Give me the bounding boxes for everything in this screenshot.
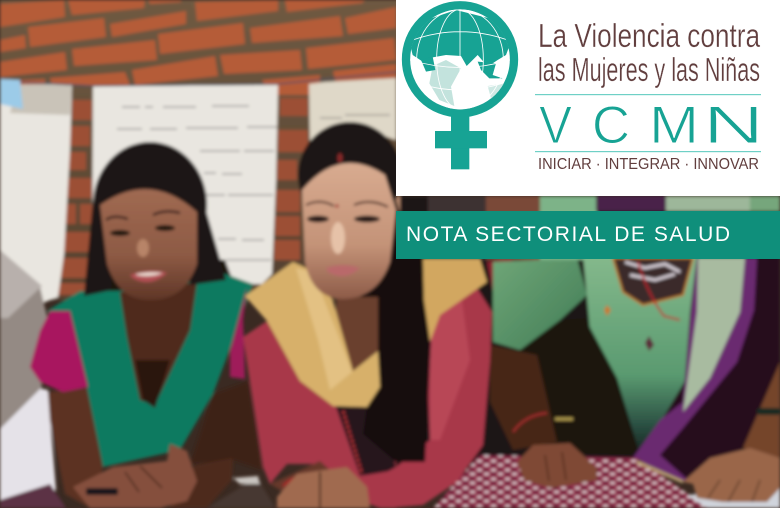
acronym: VCMN: M xyxy=(649,96,699,155)
woman centre: face xyxy=(298,122,402,299)
hand resting on table xyxy=(517,443,780,502)
tagline: INICIAR · INTEGRAR · INNOVAR xyxy=(538,156,759,173)
woman centre: dress, scarf, hair, hands xyxy=(243,200,492,508)
heading: La Violencia contra las Mujeres y las Niñas xyxy=(538,17,761,88)
brick wall xyxy=(0,0,400,300)
posters on the wall xyxy=(0,72,396,320)
girl left: face xyxy=(84,142,226,300)
banner: nota sectorial de salud: NOTA SECTORIAL DE SALUD xyxy=(406,223,730,246)
person at left edge: grey sleeve and white cloth xyxy=(0,250,56,508)
panel: white logo background xyxy=(396,0,780,196)
girl left: hair, arms, scarf, sleeves, hands xyxy=(30,250,262,508)
acronym: VCMN: N xyxy=(703,96,764,155)
icon: female symbol with globe xyxy=(406,5,514,169)
tablecloth and paper xyxy=(0,455,780,508)
banner: nota sectorial de salud xyxy=(396,211,780,259)
logo: VCMN xyxy=(406,5,764,173)
divider top xyxy=(535,94,761,95)
divider bottom xyxy=(535,151,761,152)
woman at right: torso, stole, arms xyxy=(396,196,780,482)
acronym: VCMN: C xyxy=(592,96,630,155)
acronym: VCMN: V xyxy=(539,96,573,155)
acronym: VCMN xyxy=(539,96,764,155)
